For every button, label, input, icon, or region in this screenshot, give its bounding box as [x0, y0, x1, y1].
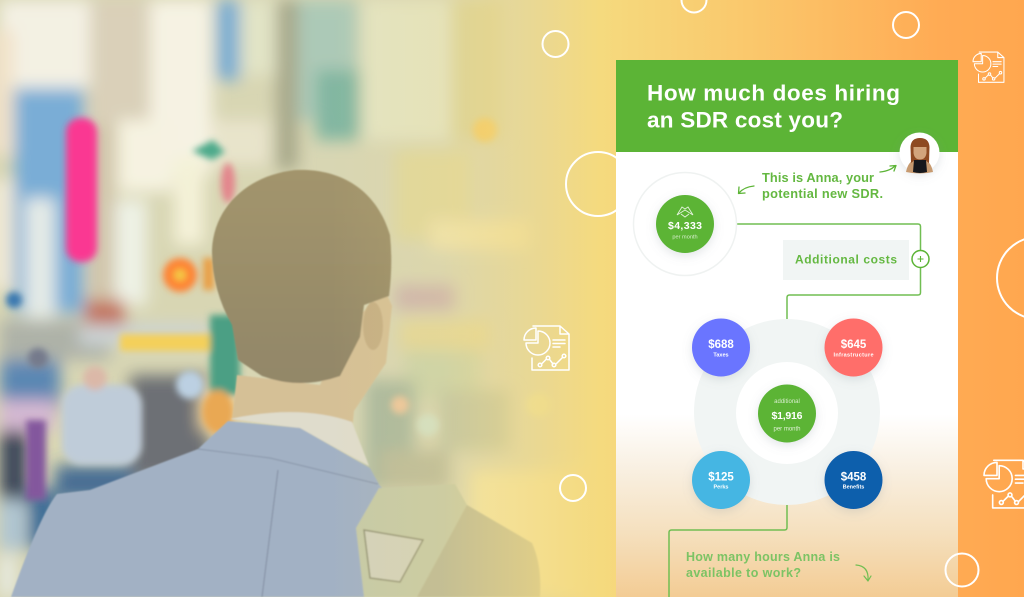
panel header band [616, 60, 958, 152]
panel: cost infographic card [616, 60, 958, 597]
connector lines [669, 224, 920, 597]
avatar: Anna [900, 132, 940, 174]
hair [212, 170, 391, 383]
infrastructure cost [824, 318, 882, 376]
benefits cost: $458 [841, 472, 867, 484]
text: hours question: How many hours Anna is [686, 550, 840, 564]
taxes cost [692, 318, 750, 376]
benefits cost [824, 451, 882, 509]
icon: handshake [677, 207, 693, 217]
ring behind cost circles [694, 319, 880, 505]
perks cost: $125 [708, 472, 734, 484]
taxes cost: $688 [708, 339, 734, 351]
text: hours question [686, 550, 840, 580]
perks cost: Perks [714, 484, 728, 490]
title: How much does hiring [647, 80, 900, 106]
arrow down [856, 565, 871, 581]
title: an SDR cost you? [647, 108, 843, 132]
benefits cost: Benefits [843, 484, 864, 490]
person seen from behind [11, 170, 540, 597]
text: this is Anna: potential new SDR. [762, 186, 883, 201]
text: this is Anna: This is Anna, your [762, 170, 874, 185]
icon: report document, right edge [984, 460, 1024, 508]
face edge, neck and ear [232, 290, 392, 432]
arrow to salary [738, 186, 754, 194]
icon: report document, centre [524, 326, 569, 370]
additional cost total [758, 384, 816, 442]
base salary circle [634, 172, 736, 276]
bag [415, 505, 540, 597]
text: hours question: available to work? [686, 566, 801, 580]
taxes cost: Taxes [713, 352, 729, 358]
additional cost total: $1,916 [772, 410, 803, 422]
bag strap [356, 484, 467, 597]
additional cost total: per month [773, 426, 801, 432]
arrow to Anna [880, 166, 896, 172]
additional costs box [783, 240, 909, 280]
plus button [912, 250, 929, 268]
decorative ring bottom right [946, 554, 978, 586]
suit jacket [11, 421, 420, 597]
infrastructure cost: $645 [841, 339, 867, 351]
title [647, 80, 900, 132]
icon: report document, top right [973, 52, 1004, 82]
base salary circle: $4,333 [668, 220, 702, 232]
base salary circle: per month [672, 234, 698, 240]
infrastructure cost: Infrastructure [834, 352, 874, 358]
decorative ring circles [542, 0, 1024, 501]
additional cost total: additional [774, 399, 800, 405]
photo background: blurred city street [0, 0, 620, 597]
additional costs box: Additional costs [795, 252, 897, 266]
perks cost [692, 451, 750, 509]
text: this is Anna [762, 170, 883, 201]
